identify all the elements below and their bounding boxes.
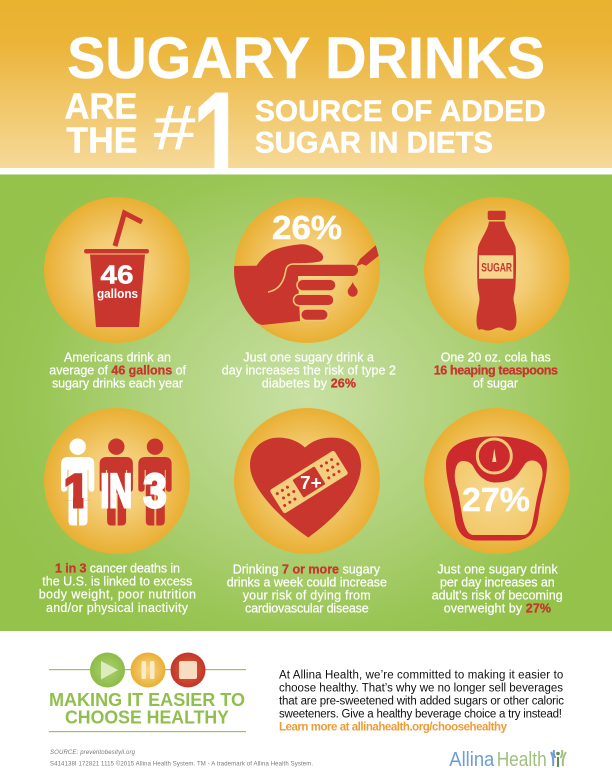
caption: 7 or more: Drinking 7 or more sugary bbox=[233, 562, 381, 576]
caption: teaspoons: of sugar bbox=[473, 376, 518, 390]
title: # bbox=[153, 94, 196, 163]
panel: 16 teaspoons bbox=[424, 197, 570, 390]
caption: 27%: Just one sugary drink bbox=[437, 562, 558, 576]
icon: play button bbox=[90, 652, 125, 688]
icon: three people: IN bbox=[100, 464, 132, 517]
caption: 46 gallons: Americans drink an bbox=[64, 350, 171, 364]
title: THE bbox=[66, 120, 137, 161]
icon: cup with straw: 46 bbox=[100, 260, 134, 290]
icon: stop button bbox=[170, 652, 206, 688]
icon: cola bottle: SUGAR bbox=[481, 261, 512, 275]
source: SOURCE: preventobesityil.org bbox=[50, 750, 136, 756]
caption: 7 or more: drinks a week could increase bbox=[227, 576, 387, 590]
panel: 1 in 3 bbox=[39, 408, 196, 615]
title: 1 bbox=[192, 65, 246, 214]
caption: 27% bbox=[432, 562, 563, 616]
caption: 26%: diabetes by 26% bbox=[262, 376, 356, 390]
icon: cup with straw bbox=[84, 213, 149, 327]
title: SOURCE OF ADDED bbox=[255, 95, 546, 128]
caption: 46 gallons: sugary drinks each year bbox=[52, 376, 183, 390]
panel: 26% diabetes bbox=[222, 197, 396, 390]
caption: 26%: Just one sugary drink a bbox=[243, 350, 374, 364]
caption: 7 or more: cardiovascular disease bbox=[245, 602, 369, 616]
caption: 7 or more bbox=[227, 562, 387, 616]
icon: bathroom scale bbox=[446, 436, 547, 540]
icon: heart with bandage bbox=[250, 438, 361, 538]
caption: 26% bbox=[222, 350, 396, 390]
caption: teaspoons: One 20 oz. cola has bbox=[441, 350, 551, 364]
icon: hand with finger prick bbox=[230, 244, 381, 325]
caption: 26%: day increases the risk of type 2 bbox=[222, 364, 396, 378]
title: SUGARY DRINKS bbox=[67, 26, 545, 91]
icon: three people bbox=[61, 438, 172, 526]
caption: 46 gallons: average of 46 gallons of bbox=[49, 364, 187, 378]
caption: 27%: per day increases an bbox=[440, 576, 555, 590]
caption: 1 in 3: 1 in 3 cancer deaths in bbox=[55, 562, 180, 576]
stat: 26%: 26% bbox=[272, 209, 342, 246]
header band bbox=[0, 0, 612, 168]
text block: commitment: sweeteners. Give a healthy beverage choice a try instead! bbox=[279, 708, 562, 720]
caption: 1 in 3: body weight, poor nutrition bbox=[39, 588, 196, 602]
text block: commitment: Learn more at allinahealth.org/choosehealthy bbox=[279, 722, 508, 734]
caption: 1 in 3: the U.S. is linked to excess bbox=[42, 575, 192, 589]
caption: 27%: overweight by 27% bbox=[444, 602, 551, 616]
caption: teaspoons bbox=[434, 350, 558, 390]
caption: 46 gallons bbox=[49, 350, 187, 390]
caption: 7 or more: your risk of dying from bbox=[243, 588, 371, 602]
logo: making it easier to choose healthy: CHOOSE HEALTHY bbox=[65, 708, 229, 728]
title: ARE bbox=[64, 86, 138, 127]
panel: 46 gallons bbox=[44, 197, 190, 390]
logo: Allina Health bbox=[449, 749, 566, 768]
panel: 27% overweight bbox=[424, 408, 570, 616]
title: SUGAR IN DIETS bbox=[255, 126, 493, 159]
icon: cup with straw: gallons bbox=[97, 287, 138, 301]
caption: 27%: adult’s risk of becoming bbox=[432, 588, 563, 602]
text block: commitment bbox=[279, 670, 564, 734]
logo: making it easier to choose healthy: MAKING IT EASIER TO bbox=[49, 690, 245, 710]
caption: 1 in 3: and/or physical inactivity bbox=[46, 601, 189, 615]
title bbox=[65, 36, 545, 168]
icon: bathroom scale: 27% bbox=[462, 481, 530, 518]
icon: pause button bbox=[130, 652, 166, 688]
caption: 1 in 3 bbox=[39, 562, 196, 615]
panel: 7 or more bbox=[227, 408, 387, 616]
icon: three people: 3 bbox=[144, 464, 166, 517]
icon: cola bottle bbox=[476, 211, 516, 330]
caption: teaspoons: 16 heaping teaspoons bbox=[434, 364, 558, 378]
green background panel bbox=[0, 174, 612, 631]
footer legal line: S414138I 172821 1115 ©2015 Allina Health System. TM - A trademark of Allina Health System. bbox=[50, 760, 313, 768]
text block: commitment: that are pre-sweetened with added sugars or other caloric bbox=[279, 696, 564, 708]
icon: three people: 1 bbox=[64, 464, 90, 517]
logo: making it easier to choose healthy bbox=[49, 652, 246, 732]
icon: heart with bandage: 7+ bbox=[300, 473, 322, 493]
text block: commitment: choose healthy. That’s why we no longer sell beverages bbox=[279, 682, 563, 694]
text block: commitment: At Allina Health, we’re committed to making it easier to bbox=[279, 670, 563, 682]
